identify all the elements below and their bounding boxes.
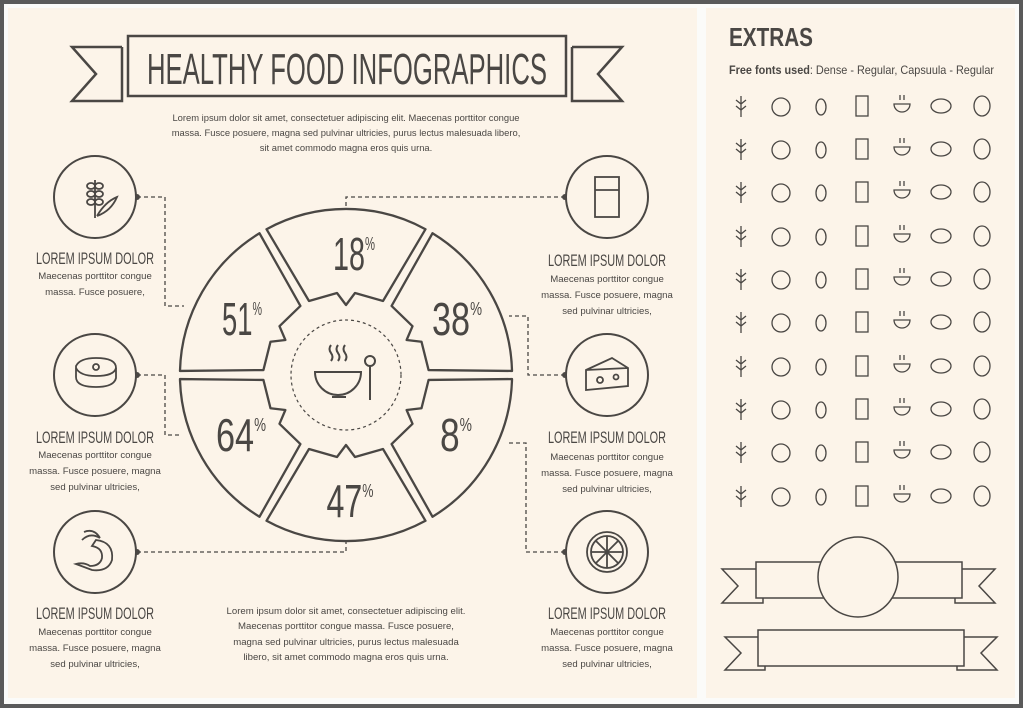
side labels: massa. Fusce posuere, magna xyxy=(29,643,162,654)
icon: glass xyxy=(595,177,619,217)
icon: orange slice xyxy=(587,532,627,572)
chart: percentages: % xyxy=(254,415,266,435)
side labels: massa. Fusce posuere, magna xyxy=(541,290,674,301)
chart: percentages: 51 xyxy=(222,293,273,345)
icon grid xyxy=(736,95,990,507)
ribbon with circle xyxy=(722,537,995,617)
side labels: sed pulvinar ultricies, xyxy=(50,482,140,493)
bottom text: Lorem ipsum dolor sit amet, consectetuer adipiscing elit. xyxy=(227,606,465,617)
side labels: Maecenas porttitor congue xyxy=(38,450,152,461)
bottom text xyxy=(227,606,465,663)
chart: percentages xyxy=(216,228,482,527)
chart: percentages: % xyxy=(470,299,482,319)
intro text: Lorem ipsum dolor sit amet, consectetuer adipiscing elit. Maecenas porttitor congue xyxy=(172,112,520,123)
chart: percentages: 38 xyxy=(432,293,483,345)
chart: percentages: % xyxy=(252,299,262,319)
bottom text: libero, sit amet commodo magna eros quis urna. xyxy=(243,652,449,663)
icon: wheat xyxy=(87,180,117,218)
side labels: Maecenas porttitor congue xyxy=(550,452,664,463)
side labels: sed pulvinar ultricies, xyxy=(562,306,652,317)
intro text xyxy=(172,112,520,153)
icon: steak xyxy=(76,358,116,387)
chart center: soup icon xyxy=(291,320,401,430)
ribbon plain xyxy=(725,630,997,670)
bottom text: magna sed pulvinar ultricies, purus lectus malesuada xyxy=(233,637,459,648)
side labels xyxy=(29,249,674,670)
chart: sectors xyxy=(162,209,530,541)
icon: cheese xyxy=(586,358,628,390)
side labels: LOREM IPSUM DOLOR xyxy=(36,249,154,268)
side labels: LOREM IPSUM DOLOR xyxy=(548,251,666,270)
side labels: LOREM IPSUM DOLOR xyxy=(36,604,154,623)
side labels: LOREM IPSUM DOLOR xyxy=(36,428,154,447)
side labels: Maecenas porttitor congue xyxy=(550,274,664,285)
chart: percentages: 47 xyxy=(326,475,378,527)
side labels: Maecenas porttitor congue xyxy=(550,627,664,638)
side labels: LOREM IPSUM DOLOR xyxy=(548,604,666,623)
side labels: massa. Fusce posuere, magna xyxy=(541,468,674,479)
chart: percentages: % xyxy=(460,415,472,435)
connectors xyxy=(137,197,565,552)
panel: main xyxy=(8,8,697,698)
side labels: LOREM IPSUM DOLOR xyxy=(548,428,666,447)
side labels: massa. Fusce posuere, magna xyxy=(541,643,674,654)
fonts note: Free fonts used: Dense - Regular, Capsuula - Regular xyxy=(729,63,994,77)
chart: percentages: 18 xyxy=(333,228,384,280)
chart: percentages: % xyxy=(362,481,374,501)
extras heading: EXTRAS xyxy=(729,22,813,52)
icon: shrimp xyxy=(76,531,112,570)
side labels: massa. Fusce posuere, xyxy=(45,287,145,298)
bottom text: Maecenas porttitor congue massa. Fusce posuere, xyxy=(238,621,454,632)
icon circles xyxy=(54,156,648,593)
title ribbon xyxy=(72,36,622,101)
side labels: sed pulvinar ultricies, xyxy=(562,484,652,495)
side labels: Maecenas porttitor congue xyxy=(38,271,152,282)
title: HEALTHY FOOD INFOGRAPHICS xyxy=(147,45,547,94)
chart: percentages: % xyxy=(365,234,375,254)
side labels: sed pulvinar ultricies, xyxy=(562,659,652,670)
side labels: Maecenas porttitor congue xyxy=(38,627,152,638)
chart: percentages: 64 xyxy=(216,409,267,461)
intro text: massa. Fusce posuere, magna sed pulvinar ultricies, purus lectus malesuada libero, xyxy=(172,127,520,138)
side labels: massa. Fusce posuere, magna xyxy=(29,466,162,477)
side labels: sed pulvinar ultricies, xyxy=(50,659,140,670)
chart: percentages: 8 xyxy=(440,409,466,461)
panel: extras xyxy=(706,8,1015,698)
intro text: sit amet commodo magna eros quis urna. xyxy=(260,142,432,153)
